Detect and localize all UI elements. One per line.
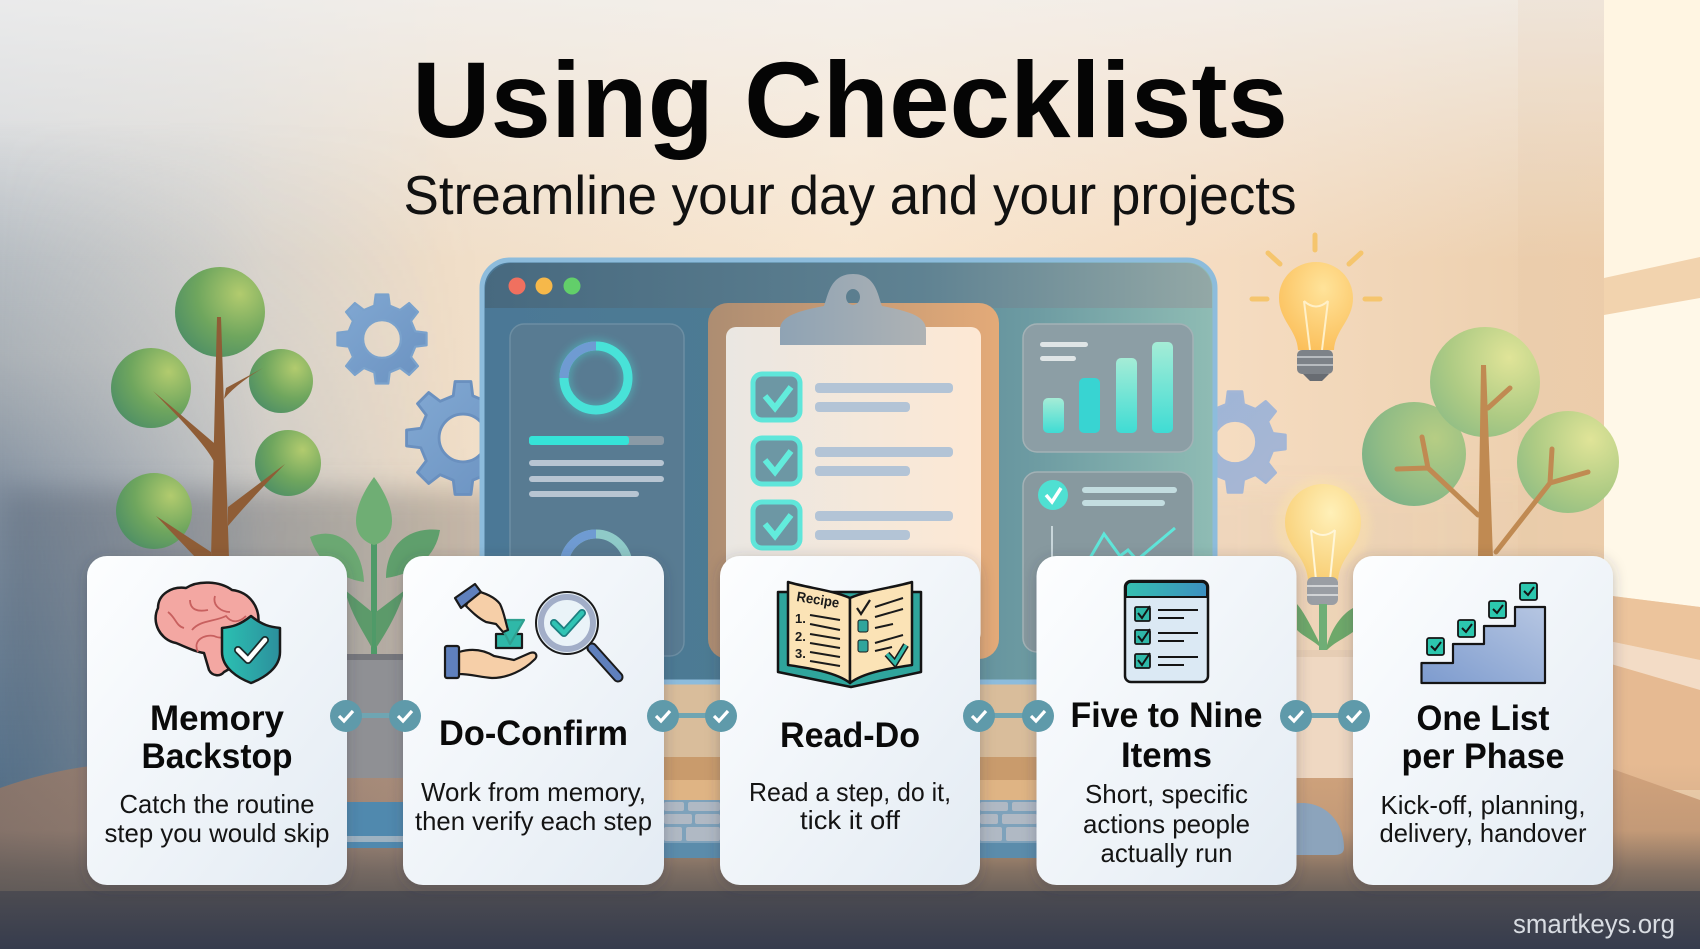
background: desk: [0, 763, 1700, 898]
illustration: left potted plant: [310, 477, 440, 778]
checklist rows: [753, 374, 953, 548]
heading: [142, 699, 292, 776]
illustration: left tree: [111, 267, 321, 558]
icon: checklist document: [1125, 581, 1208, 682]
icon: recipe book: 2.: [795, 629, 806, 644]
connector: cards 1 to 2: [330, 700, 421, 732]
heading: Items: [1121, 736, 1212, 775]
heading: per Phase: [1402, 737, 1564, 776]
right bar chart panel: [1023, 324, 1193, 452]
card: Five to Nine Items: [1036, 556, 1296, 885]
heading: Memory: [150, 699, 285, 738]
heading: Five to Nine: [1070, 696, 1262, 735]
description: actions people: [1083, 809, 1250, 839]
background: window: [1604, 0, 1700, 790]
illustration: right tree: [1362, 327, 1619, 558]
illustration: mouse: [1292, 803, 1344, 855]
clipboard: [708, 274, 999, 659]
icon: recipe book: Recipe: [796, 588, 841, 611]
icon: right gear: [1185, 392, 1285, 492]
title: Using Checklists: [412, 39, 1288, 160]
monitor title bar: [485, 263, 1212, 308]
connector: cards 4 to 5: [1280, 700, 1370, 732]
description: [1083, 779, 1250, 868]
left dashboard panel: [510, 324, 684, 656]
icon: large blue gear: [407, 382, 519, 494]
window traffic lights: [508, 278, 580, 294]
heading: [1402, 699, 1564, 776]
icon: stairs with checkboxes: [1422, 583, 1545, 683]
description: [415, 777, 652, 836]
heading: One List: [1416, 699, 1550, 738]
description: [749, 777, 951, 835]
connector: cards 3 to 4: [963, 700, 1054, 732]
card: Memory Backstop: [87, 556, 347, 885]
clipboard clip: [780, 274, 926, 345]
icon: small blue gear: [337, 294, 427, 384]
icon: hands and magnifier: [445, 584, 618, 678]
card: Read-Do: [720, 556, 980, 885]
illustration: desktop monitor window: [482, 260, 1215, 802]
icon: brain with shield: [156, 583, 280, 683]
description: then verify each step: [415, 806, 652, 836]
footer band: [0, 891, 1700, 949]
heading: Read-Do: [780, 716, 920, 755]
icon: recipe book: 1.: [795, 611, 806, 626]
description: tick it off: [800, 805, 901, 835]
illustration: keyboard: [347, 800, 1055, 858]
description: Read a step, do it,: [749, 777, 951, 807]
description: step you would skip: [104, 818, 330, 848]
subtitle: Streamline your day and your projects: [404, 164, 1296, 226]
heading: Do-Confirm: [439, 714, 628, 753]
icon: recipe book: [778, 582, 921, 687]
description: Kick-off, planning,: [1380, 790, 1586, 820]
heading: [1070, 696, 1262, 775]
card: One List per Phase: [1353, 556, 1613, 885]
connector: cards 2 to 3: [647, 700, 737, 732]
description: Work from memory,: [421, 777, 646, 807]
footer: website: smartkeys.org: [1513, 909, 1675, 939]
card: Do-Confirm: [403, 556, 664, 885]
illustration: lower bulb plant: [1275, 477, 1371, 778]
description: delivery, handover: [1380, 818, 1587, 848]
icon: recipe book: 3.: [795, 646, 806, 661]
description: Short, specific: [1085, 779, 1248, 809]
description: Catch the routine: [120, 789, 314, 819]
description: [1380, 790, 1587, 848]
description: [104, 789, 330, 848]
heading: Backstop: [142, 737, 292, 776]
illustration: top light bulb: [1252, 235, 1380, 381]
description: actually run: [1100, 838, 1232, 868]
right status panel: [1023, 472, 1193, 652]
